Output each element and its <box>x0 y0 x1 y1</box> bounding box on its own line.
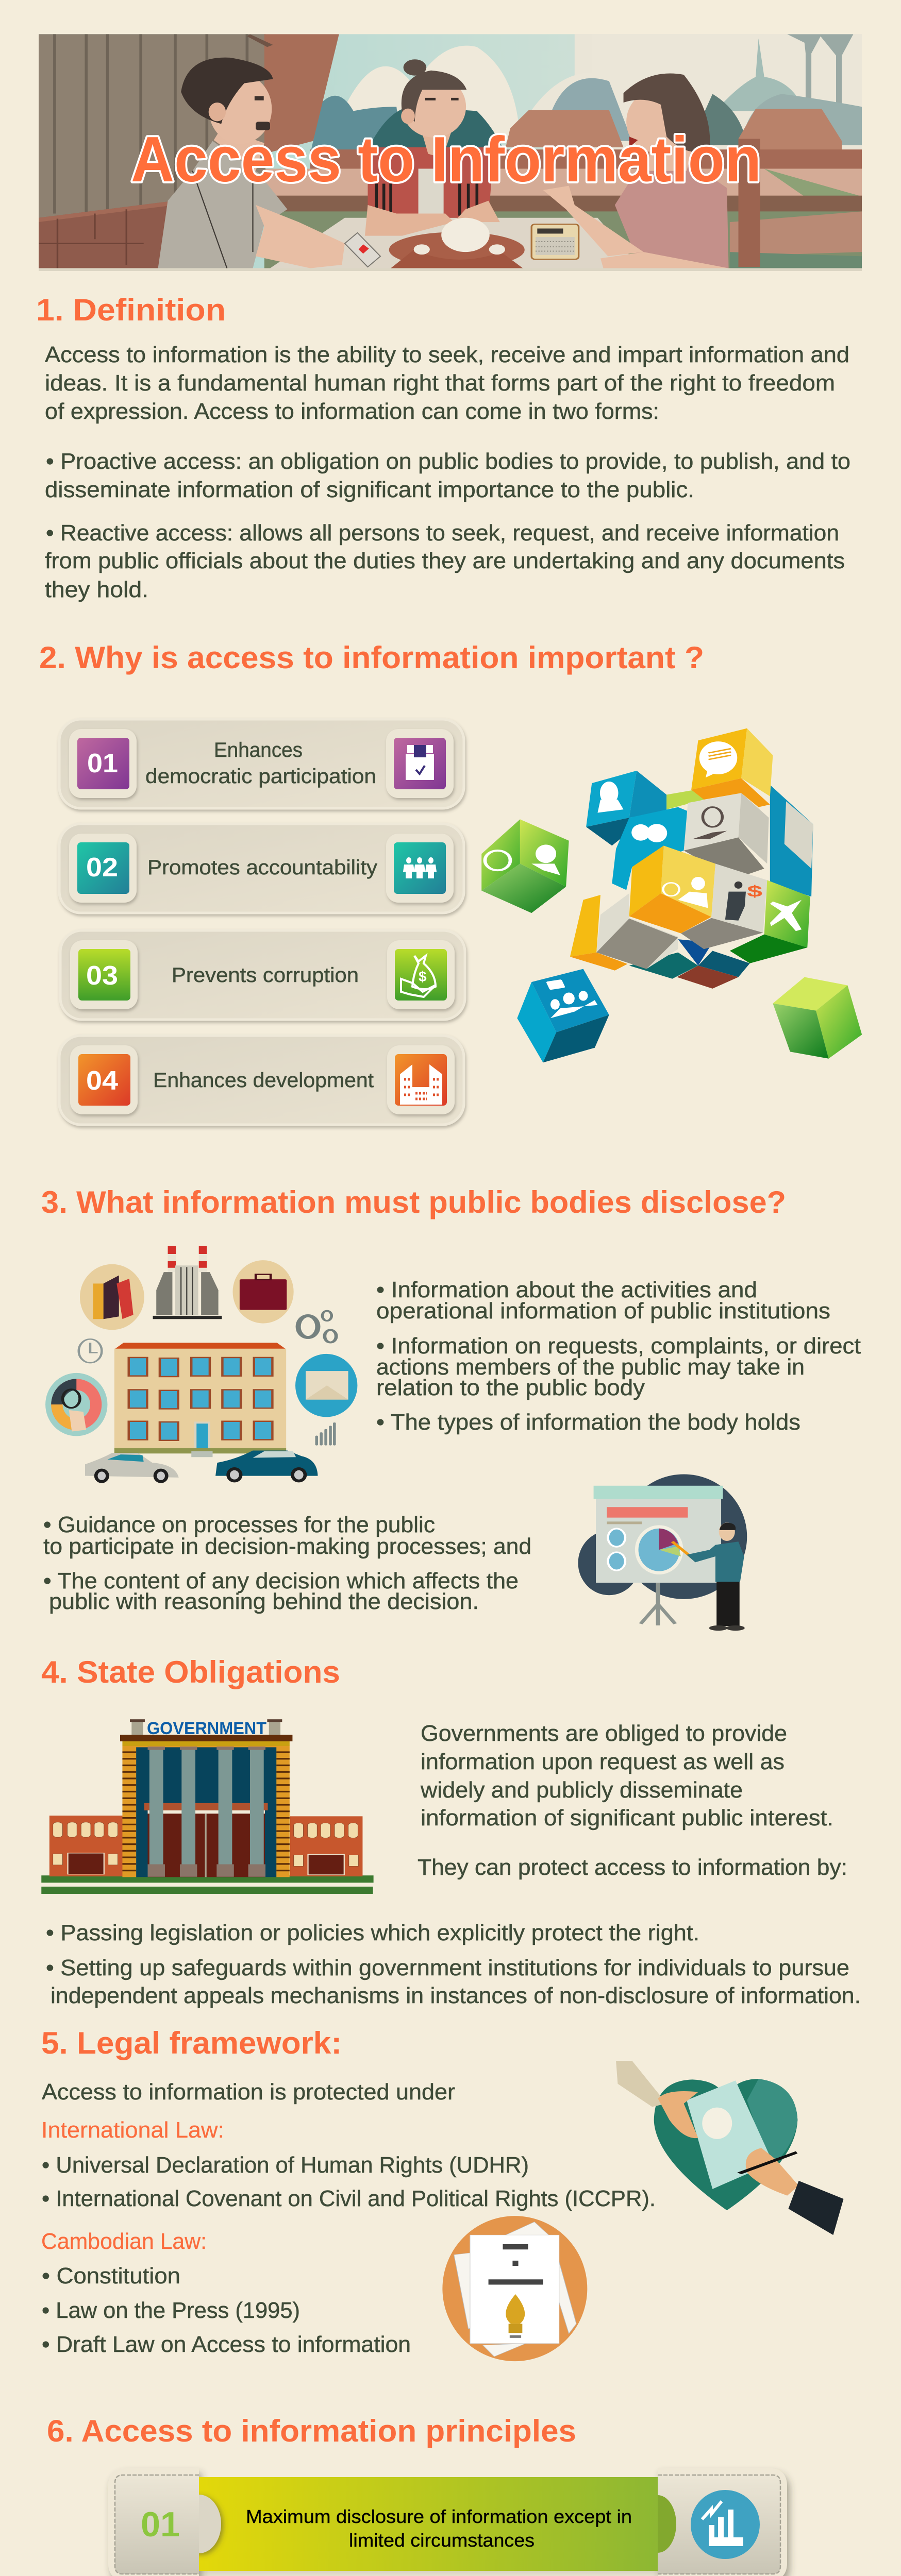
blue car <box>215 1451 318 1482</box>
icon: signal bars <box>316 1423 335 1445</box>
icon: briefcase <box>232 1260 294 1324</box>
banner illustration <box>39 34 862 271</box>
icon: gears <box>298 1311 336 1343</box>
panel: development: Enhances development <box>153 1069 374 1092</box>
cube cluster <box>570 728 813 989</box>
definition text: from public officials about the duties they are undertaking and any documents <box>45 548 845 573</box>
definition text: ideas. It is a fundamental human right that forms part of the right to freedom <box>45 370 835 396</box>
legal framework text: International Law: <box>41 2117 224 2143</box>
disclosure bullets bottom <box>43 1512 531 1614</box>
panel: development <box>59 1036 464 1125</box>
legal framework text: • Draft Law on Access to information <box>42 2332 411 2357</box>
government sign text: GOVERNMENT <box>147 1719 266 1738</box>
legal framework text: • Constitution <box>42 2263 180 2289</box>
state obligations text: widely and publicly disseminate <box>420 1777 743 1803</box>
definition text: Access to information is the ability to seek, receive and impart information and <box>45 342 849 367</box>
principle card 01: Maximum disclosure of information except in <box>246 2506 632 2527</box>
principle card 01: limited circumstances <box>349 2530 535 2551</box>
disclosure bullets top: • The types of information the body holds <box>376 1410 800 1435</box>
section 1 heading: 1. Definition <box>36 293 226 327</box>
building <box>114 1343 286 1457</box>
section 6 heading: 6. Access to information principles <box>47 2414 576 2448</box>
state obligations bullets: • Setting up safeguards within government institutions for individuals to pursue <box>46 1955 849 1980</box>
icon: factory <box>153 1246 222 1319</box>
disclosure bullets top: • Information about the activities and <box>376 1277 757 1302</box>
icon: clock <box>79 1339 102 1363</box>
state obligations bullets: independent appeals mechanisms in instances of non-disclosure of information. <box>51 1983 861 2008</box>
definition text: • Reactive access: allows all persons to seek, request, and receive information <box>46 520 839 546</box>
icon: books <box>80 1264 144 1330</box>
panel: democratic participation: democratic participation <box>145 765 376 788</box>
disclosure bullets bottom: • Guidance on processes for the public <box>43 1512 435 1537</box>
state obligations text: Governments are obliged to provide <box>421 1721 787 1746</box>
definition text: of expression. Access to information can come in two forms: <box>45 399 659 424</box>
panel: corruption: $ <box>419 969 427 985</box>
state obligations text: information upon request as well as <box>421 1749 785 1774</box>
icon: pie search <box>45 1373 107 1436</box>
state obligations text: They can protect access to information by: <box>418 1855 847 1880</box>
state obligations text: information of significant public interest. <box>421 1805 833 1831</box>
panel: democratic participation <box>59 719 464 808</box>
section 2 heading: 2. Why is access to information important ? <box>39 640 704 675</box>
panel: accountability: 02 <box>86 853 118 883</box>
legal framework text: Access to information is protected under <box>42 2079 455 2105</box>
main title: Access to Information <box>131 124 761 195</box>
disclosure bullets top <box>376 1277 861 1435</box>
disclosure bullets bottom: • The content of any decision which affects the <box>43 1568 519 1594</box>
panel: corruption: Prevents corruption <box>172 964 359 987</box>
panel: corruption <box>60 930 465 1020</box>
disclosure bullets top: operational information of public institutions <box>376 1298 830 1324</box>
state obligations bullets <box>46 1920 861 2008</box>
definition text <box>45 342 850 602</box>
panel: corruption: 03 <box>86 961 118 991</box>
legal framework text: • Universal Declaration of Human Rights (UDHR) <box>42 2153 529 2178</box>
state obligations text <box>418 1721 847 1880</box>
section 3 heading: 3. What information must public bodies disclose? <box>41 1185 786 1219</box>
disclosure bullets top: actions members of the public may take in <box>376 1354 805 1380</box>
presenter illustration <box>578 1474 747 1631</box>
legal framework text <box>41 2079 656 2357</box>
panel: accountability: Promotes accountability <box>147 856 377 879</box>
cube: lime plain <box>773 977 862 1059</box>
peace heart illustration <box>616 2061 844 2235</box>
state obligations bullets: • Passing legislation or policies which explicitly protect the right. <box>46 1920 699 1945</box>
disclosure bullets bottom: public with reasoning behind the decision. <box>49 1589 479 1614</box>
grey car <box>85 1453 179 1483</box>
section 4 heading: 4. State Obligations <box>41 1655 340 1689</box>
icon: envelope <box>295 1354 357 1417</box>
panel: development: 04 <box>86 1066 118 1096</box>
definition text: disseminate information of significant importance to the public. <box>45 477 694 502</box>
panel: accountability <box>59 824 464 913</box>
panel: democratic participation: Enhances <box>214 739 303 761</box>
section 5 heading: 5. Legal framework: <box>41 2026 342 2060</box>
government building illustration <box>41 1719 374 1894</box>
panel: democratic participation: 01 <box>87 749 118 778</box>
icon: growth chart <box>691 2490 760 2559</box>
cube: green car and person <box>481 819 569 913</box>
disclosure bullets top: • Information on requests, complaints, or direct <box>376 1333 861 1359</box>
principle card 01: 01 <box>141 2505 180 2544</box>
law booklet illustration <box>442 2216 587 2361</box>
office building illustration <box>45 1246 357 1483</box>
cube: blue people <box>517 969 609 1062</box>
banner underline <box>39 268 862 271</box>
disclosure bullets top: relation to the public body <box>376 1375 645 1400</box>
legal framework text: Cambodian Law: <box>41 2229 207 2254</box>
definition text: • Proactive access: an obligation on public bodies to provide, to publish, and to <box>46 449 850 474</box>
legal framework text: • Law on the Press (1995) <box>42 2298 300 2323</box>
principle card 01 <box>108 2468 787 2576</box>
definition text: they hold. <box>45 577 148 602</box>
3D icon cubes <box>481 728 862 1062</box>
legal framework text: • International Covenant on Civil and Political Rights (ICCPR). <box>42 2186 656 2211</box>
disclosure bullets bottom: to participate in decision-making processes; and <box>43 1534 531 1559</box>
cube cluster: $ <box>747 883 762 900</box>
